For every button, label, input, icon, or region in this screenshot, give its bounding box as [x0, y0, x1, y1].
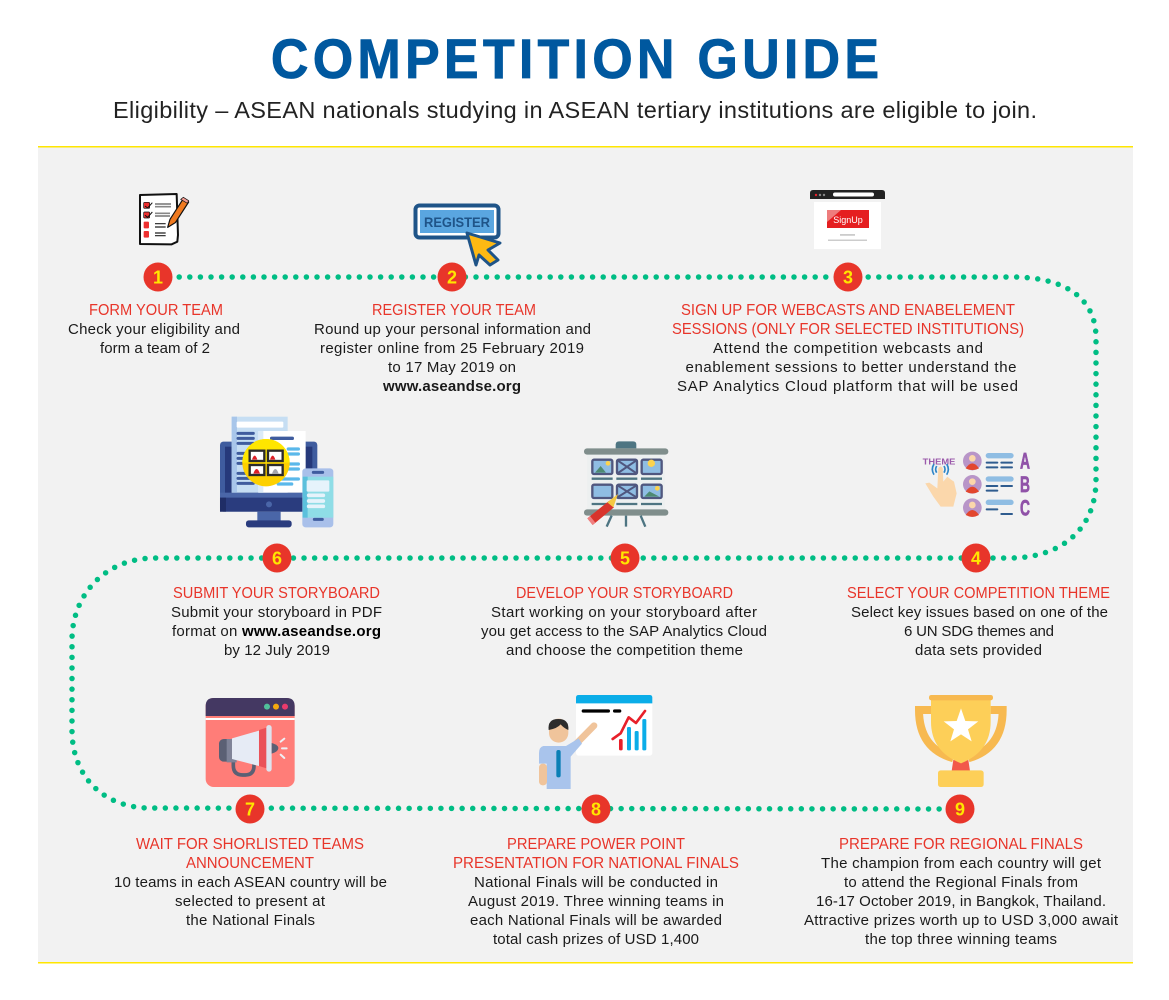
- icon: browser sign up page: SignUp: [833, 215, 863, 225]
- body text: Submit your storyboard in PDF: [171, 604, 382, 621]
- heading: [672, 302, 1024, 338]
- step 8: prepare presentation: [453, 695, 739, 948]
- body text: [171, 604, 382, 659]
- step 1: form your team: [68, 194, 240, 357]
- badge 4: [962, 544, 990, 572]
- body text: by 12 July 2019: [224, 642, 330, 659]
- badge 2: 2: [447, 268, 457, 288]
- body text: total cash prizes of USD 1,400: [493, 931, 699, 948]
- heading: REGISTER YOUR TEAM: [372, 302, 536, 319]
- heading: SIGN UP FOR WEBCASTS AND ENABELEMENT: [681, 302, 1015, 319]
- heading: SESSIONS (ONLY FOR SELECTED INSTITUTIONS): [672, 321, 1024, 338]
- icon: gold trophy: [919, 695, 1003, 787]
- icon: register button with cursor: REGISTER: [424, 214, 490, 230]
- heading: [453, 836, 739, 872]
- panel: guide background: [38, 146, 1133, 964]
- icon: theme selection: C: [1020, 495, 1030, 520]
- body text: 10 teams in each ASEAN country will be: [114, 874, 387, 891]
- badge 3: [834, 262, 862, 292]
- heading: WAIT FOR SHORLISTED TEAMS: [136, 836, 364, 853]
- dotted route connecting the steps: [72, 277, 1096, 809]
- body text: [314, 321, 591, 395]
- body text: format on www.aseandse.org: [172, 623, 381, 640]
- badge 9: 9: [955, 800, 965, 820]
- body text: Attend the competition webcasts and: [713, 340, 983, 357]
- step 4: select competition theme: [847, 449, 1110, 659]
- icon: browser sign up page: [810, 190, 885, 249]
- badge 7: 7: [245, 800, 255, 820]
- body text: to 17 May 2019 on: [388, 359, 516, 376]
- body text: Select key issues based on one of the: [851, 604, 1108, 621]
- heading: [136, 836, 364, 872]
- icon: theme selection: [923, 449, 1030, 520]
- step 6: submit storyboard: [171, 417, 382, 659]
- body text: [468, 874, 724, 948]
- body text: the National Finals: [186, 912, 315, 929]
- body text: data sets provided: [915, 642, 1042, 659]
- heading: SUBMIT YOUR STORYBOARD: [173, 585, 380, 602]
- body text: you get access to the SAP Analytics Cloud: [481, 623, 767, 640]
- body text: Start working on your storyboard after: [491, 604, 757, 621]
- body text: The champion from each country will get: [821, 855, 1102, 872]
- heading: PREPARE FOR REGIONAL FINALS: [839, 836, 1083, 853]
- badge 6: 6: [272, 548, 282, 568]
- eligibility subtitle: Eligibility – ASEAN nationals studying in ASEAN tertiary institutions are eligible to join.: [113, 97, 1037, 123]
- heading: SELECT YOUR COMPETITION THEME: [847, 585, 1110, 602]
- badge 2: [438, 262, 466, 292]
- badge 5: [610, 544, 640, 572]
- step 2: register your team: [314, 206, 591, 395]
- body text: Round up your personal information and: [314, 321, 591, 338]
- icon: theme selection: A: [1020, 449, 1030, 474]
- body text: [481, 604, 767, 659]
- body text: [804, 855, 1119, 948]
- icon: megaphone in browser window: [206, 698, 295, 787]
- body text: register online from 25 February 2019: [320, 340, 584, 357]
- body text: form a team of 2: [100, 340, 210, 357]
- body text: SAP Analytics Cloud platform that will be used: [677, 378, 1018, 395]
- icon: register button with cursor: [416, 206, 500, 265]
- badge 1: 1: [153, 268, 163, 288]
- icon: theme selection: THEME: [923, 456, 956, 466]
- badge 8: [582, 794, 610, 824]
- body text: 16-17 October 2019, in Bangkok, Thailand.: [816, 893, 1106, 910]
- body text: selected to present at: [175, 893, 326, 910]
- step 9: prepare for regional finals: [804, 695, 1119, 948]
- body text: Attractive prizes worth up to USD 3,000 await: [804, 912, 1119, 929]
- icon: storyboard easel with pencil: [584, 441, 668, 527]
- step 7: wait for shortlist: [114, 698, 387, 929]
- title: COMPETITION GUIDE: [271, 28, 879, 90]
- body text: each National Finals will be awarded: [470, 912, 722, 929]
- badge 9: [946, 794, 974, 824]
- heading: ANNOUNCEMENT: [186, 855, 314, 872]
- heading: FORM YOUR TEAM: [89, 302, 223, 319]
- body text: August 2019. Three winning teams in: [468, 893, 724, 910]
- icon: checklist and pencil: [140, 194, 189, 244]
- step 5: develop storyboard: [481, 441, 767, 659]
- body text: and choose the competition theme: [506, 642, 743, 659]
- badge 5: 5: [620, 548, 630, 568]
- body text: [114, 874, 387, 929]
- badge 3: 3: [843, 268, 853, 288]
- body text: [677, 340, 1018, 395]
- body text: 6 UN SDG themes and: [904, 623, 1054, 640]
- heading: PREPARE POWER POINT: [507, 836, 685, 853]
- step 3: sign up for webcasts: [672, 190, 1024, 395]
- body text: [851, 604, 1108, 659]
- body text: the top three winning teams: [865, 931, 1057, 948]
- icon: presenter with chart: [539, 695, 652, 789]
- badge 8: 8: [591, 800, 601, 820]
- body text: [68, 321, 240, 357]
- body text: www.aseandse.org: [382, 378, 521, 395]
- heading: DEVELOP YOUR STORYBOARD: [516, 585, 733, 602]
- body text: National Finals will be conducted in: [474, 874, 718, 891]
- heading: PRESENTATION FOR NATIONAL FINALS: [453, 855, 739, 872]
- body text: Check your eligibility and: [68, 321, 240, 338]
- badge 6: [262, 544, 292, 572]
- badge 7: [236, 794, 264, 824]
- body text: enablement sessions to better understand the: [686, 359, 1016, 376]
- badge 1: [144, 262, 172, 292]
- icon: theme selection: B: [1020, 472, 1030, 497]
- icon: monitor, documents and phone: [220, 417, 333, 527]
- badge 4: 4: [971, 548, 981, 568]
- body text: to attend the Regional Finals from: [844, 874, 1078, 891]
